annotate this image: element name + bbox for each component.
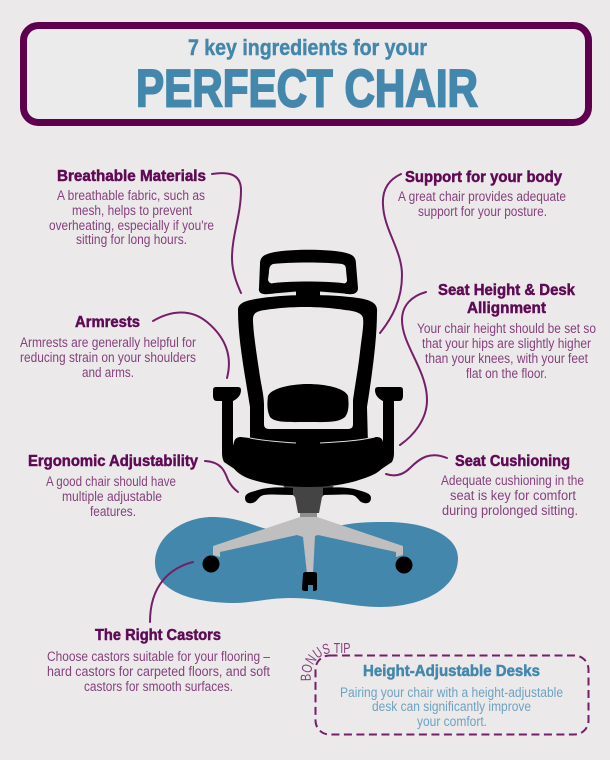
text: ergonomic adjustability: features. <box>90 504 136 519</box>
text: armrests: reducing strain on your shoulders <box>20 350 196 365</box>
text: breathable materials: sitting for long hours. <box>76 232 187 247</box>
text: ergonomic adjustability <box>28 453 198 519</box>
connector: cushioning <box>386 455 447 475</box>
text: support for your body: support for your posture. <box>418 204 547 219</box>
headrest <box>259 250 358 300</box>
text: seat cushioning: during prolonged sitting. <box>442 503 578 518</box>
text: support for your body <box>398 169 566 219</box>
bonus tip label: BONUS TIP <box>300 643 350 680</box>
text: armrests <box>20 314 196 380</box>
text: seat cushioning: Adequate cushioning in the <box>441 473 584 488</box>
text: seat cushioning: seat is key for comfort <box>450 488 576 503</box>
text: seat height: Seat Height & Desk <box>438 282 575 299</box>
text: seat height: flat on the floor. <box>466 366 547 381</box>
text: seat height: that your hips are slightly higher <box>422 336 591 351</box>
text: armrests: and arms. <box>82 365 134 380</box>
armrests <box>213 387 403 470</box>
castors <box>202 556 412 591</box>
text: ergonomic adjustability: Ergonomic Adjustability <box>28 453 198 470</box>
bonus heading: Height-Adjustable Desks <box>363 663 540 680</box>
title banner <box>24 26 588 122</box>
lumbar support <box>267 384 349 422</box>
text: ergonomic adjustability: multiple adjustable <box>62 489 162 504</box>
text: ergonomic adjustability: A good chair should have <box>46 474 176 489</box>
office chair <box>202 250 412 591</box>
text: seat height <box>417 282 596 381</box>
chair base <box>213 517 403 574</box>
connector: breathable materials <box>212 173 241 293</box>
text: seat height: than your knees, with your feet <box>425 351 588 366</box>
back frame <box>238 295 377 445</box>
text: seat cushioning: Seat Cushioning <box>455 453 570 470</box>
text: seat cushioning <box>441 453 584 518</box>
seat <box>231 437 385 487</box>
main title: PERFECT CHAIR <box>136 60 478 118</box>
connector: seat height <box>400 292 427 445</box>
floor rug <box>155 517 458 607</box>
text: breathable materials: overheating, especially if you're <box>49 218 214 233</box>
text: breathable materials <box>49 168 214 247</box>
connector: ergonomic <box>205 461 238 492</box>
connector: armrests <box>153 312 229 378</box>
text: the right castors: The Right Castors <box>95 627 221 644</box>
text: breathable materials: mesh, helps to prevent <box>72 203 192 218</box>
connector: castors <box>150 562 193 622</box>
text: armrests: Armrests <box>75 314 140 331</box>
bonus body: Pairing your chair with a height-adjustable <box>340 685 563 700</box>
text: support for your body: Support for your body <box>405 169 562 186</box>
text: the right castors <box>47 627 270 694</box>
levers <box>245 487 371 503</box>
text: the right castors: castors for smooth surfaces. <box>84 679 233 694</box>
bonus body: desk can significantly improve <box>372 699 531 714</box>
text: seat height: Allignment <box>467 300 547 317</box>
bonus body <box>340 685 563 729</box>
text: armrests: Armrests are generally helpful for <box>20 335 196 350</box>
text: support for your body: A great chair provides adequate <box>398 189 566 204</box>
text: the right castors: hard castors for carpeted floors, and soft <box>47 664 270 679</box>
gas lift <box>283 486 334 513</box>
bonus body: your comfort. <box>417 714 487 729</box>
connector: support <box>380 174 402 333</box>
text: breathable materials: A breathable fabric, such as <box>57 188 205 203</box>
subtitle: 7 key ingredients for your <box>188 35 427 60</box>
panel: bonus tip <box>300 643 590 736</box>
text: breathable materials: Breathable Materials <box>57 168 206 185</box>
text: the right castors: Choose castors suitable for your flooring – <box>47 649 270 664</box>
